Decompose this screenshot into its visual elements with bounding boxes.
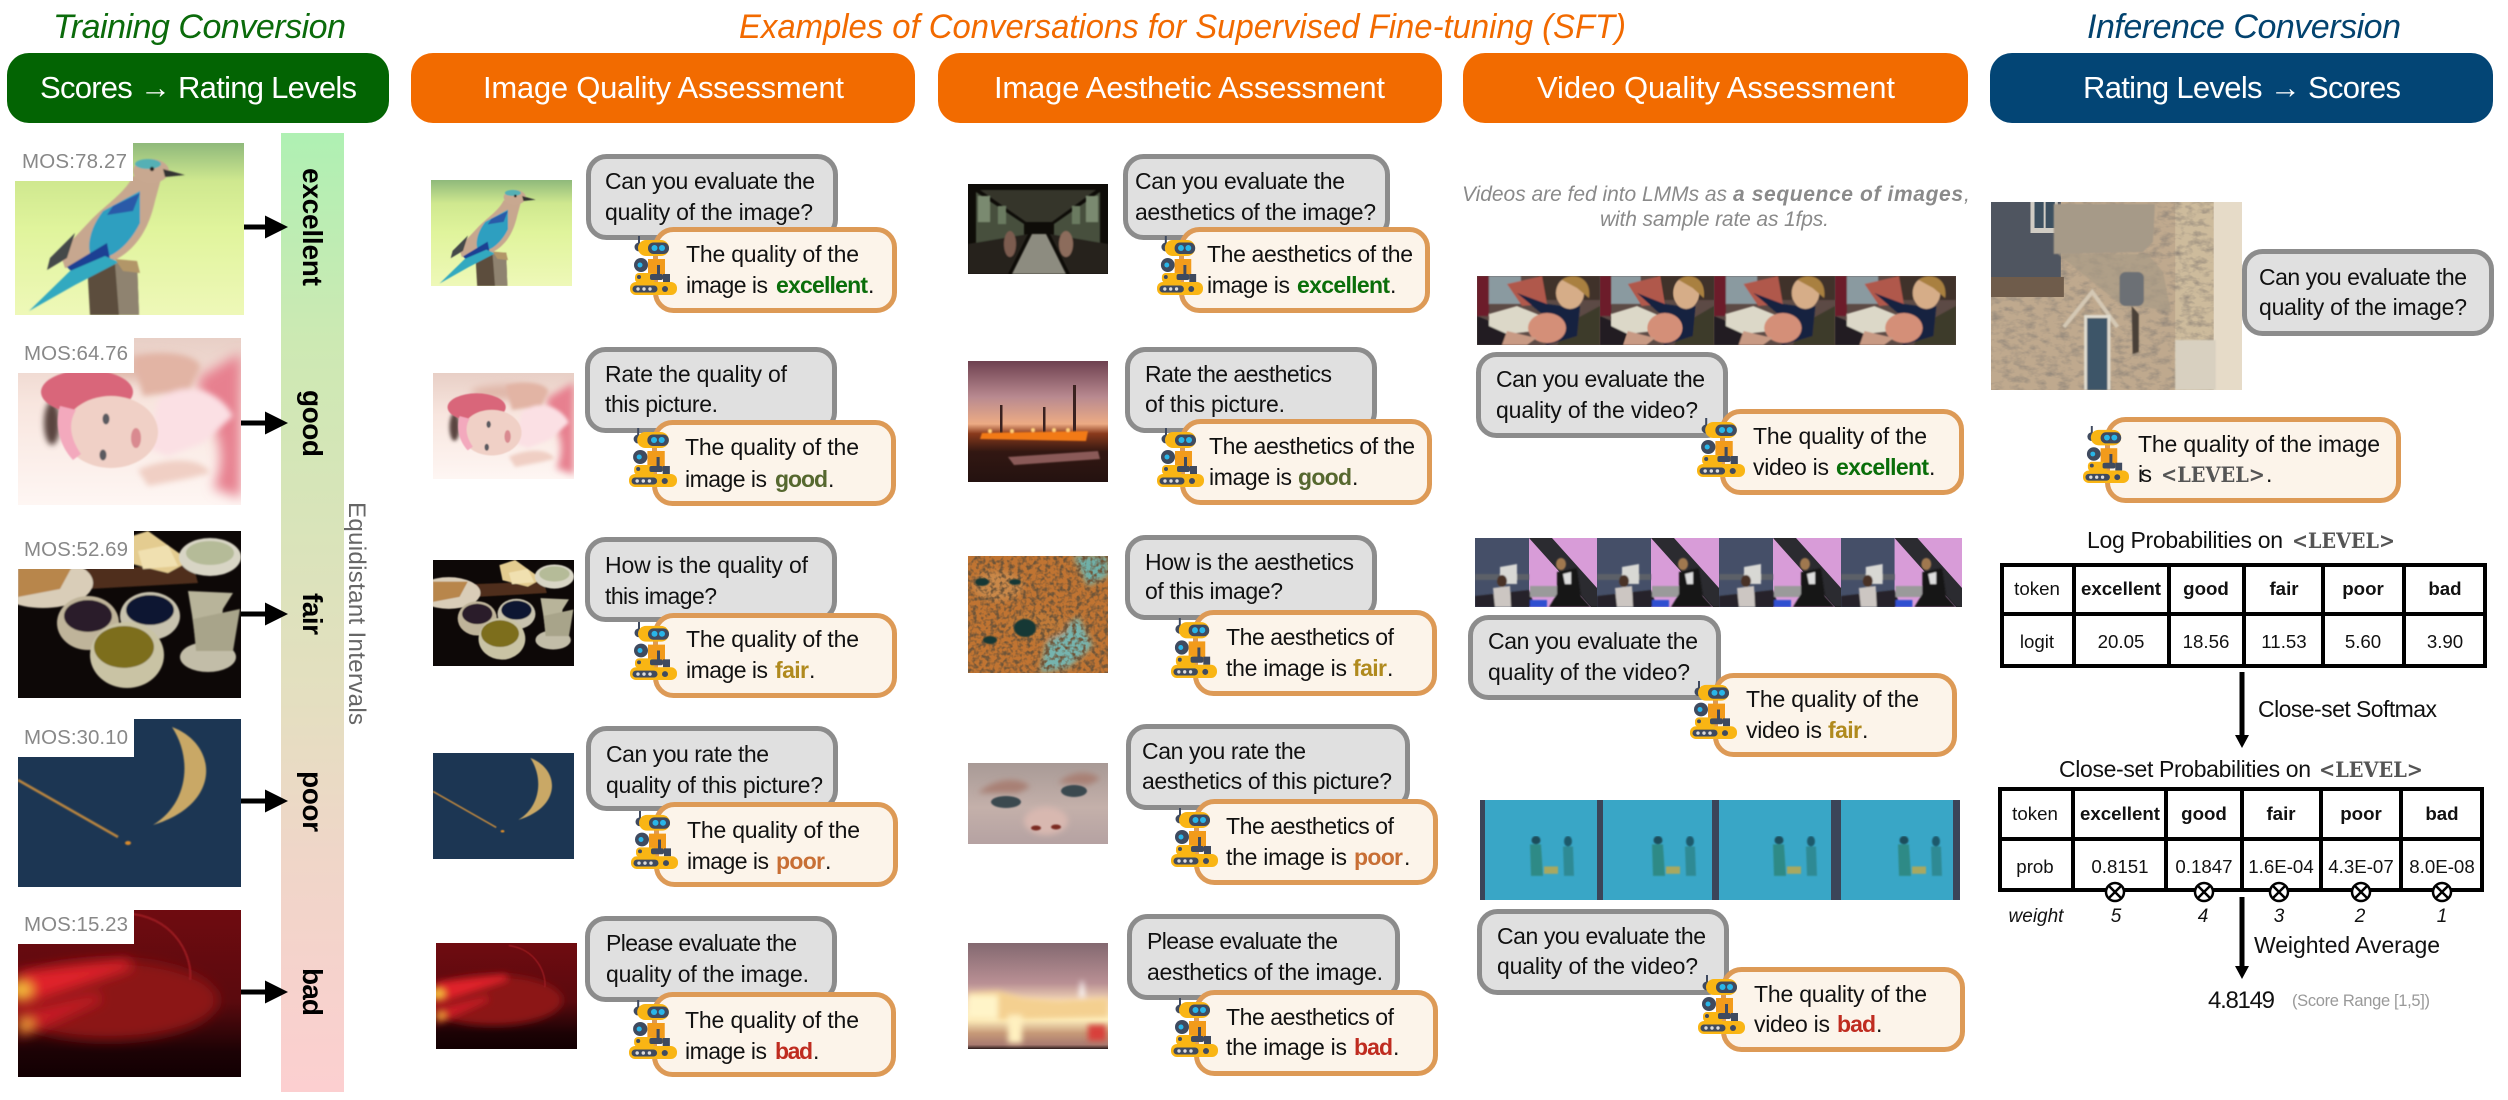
answer bubble: The quality of the bbox=[687, 817, 860, 843]
sample: MOS 30.10: MOS:30.10 bbox=[24, 726, 128, 749]
answer bubble: bad bbox=[1354, 1034, 1393, 1060]
table: close-set probabilities: 4.3E-07 bbox=[2328, 856, 2394, 877]
photo bbox=[433, 373, 574, 479]
answer bubble: video is bbox=[1746, 717, 1822, 743]
answer bubble: The aesthetics of bbox=[1226, 813, 1395, 839]
question bubble: Can you evaluate the bbox=[1497, 923, 1706, 949]
table: log probabilities: good bbox=[2183, 578, 2229, 599]
table: log probabilities: 18.56 bbox=[2183, 631, 2229, 652]
table: close-set probabilities: 0.8151 bbox=[2091, 856, 2149, 877]
arrow bbox=[241, 602, 288, 626]
question bubble bbox=[1128, 726, 1408, 808]
icon: robot bbox=[629, 1000, 677, 1059]
table: log probabilities: logit bbox=[2020, 631, 2055, 652]
photo bbox=[431, 180, 572, 286]
answer bubble: excellent bbox=[1836, 454, 1929, 480]
header: Video Quality Assessment: Video Quality Assessment bbox=[1537, 70, 1895, 105]
table: close-set probabilities: excellent bbox=[2080, 803, 2160, 824]
icon: robot bbox=[630, 236, 677, 295]
example: excellent bbox=[1477, 276, 1962, 492]
answer bubble: the image is bbox=[1226, 844, 1347, 870]
icon: robot bbox=[1171, 998, 1218, 1057]
question bubble: aesthetics of the image. bbox=[1147, 959, 1383, 985]
weights row: 1 bbox=[2437, 906, 2447, 927]
photo bbox=[968, 361, 1108, 482]
question bubble: Can you evaluate the bbox=[1488, 628, 1698, 654]
title: Examples of Conversations: Examples of Conversations for Supervised Fine-tuning (SFT) bbox=[739, 8, 1626, 46]
video frames bbox=[1480, 800, 1960, 900]
question bubble: Can you rate the bbox=[1142, 738, 1306, 764]
answer bubble: . bbox=[1876, 1011, 1882, 1037]
example: bad bbox=[968, 916, 1436, 1074]
answer bubble: The quality of the bbox=[1746, 686, 1919, 712]
arrow bbox=[241, 980, 288, 1004]
score range note: (Score Range [1,5]) bbox=[2292, 992, 2430, 1010]
question bubble bbox=[1478, 354, 1726, 436]
answer bubble: . bbox=[828, 466, 834, 492]
title: Training Conversion: Training Conversion bbox=[53, 8, 346, 46]
table: close-set probabilities: fair bbox=[2266, 803, 2296, 824]
answer bubble: The quality of the bbox=[686, 626, 859, 652]
table: log probabilities: 11.53 bbox=[2261, 631, 2307, 652]
arrow: softmax bbox=[2235, 672, 2249, 748]
answer bubble: The aesthetics of the bbox=[1207, 241, 1413, 267]
label: excellent: excellent bbox=[297, 168, 328, 286]
sample: MOS 52.69: MOS:52.69 bbox=[24, 538, 128, 561]
question bubble: Can you rate the bbox=[606, 741, 769, 767]
question bubble: of this picture. bbox=[1145, 391, 1285, 417]
label: bad: bad bbox=[297, 968, 328, 1016]
photo bbox=[968, 184, 1108, 274]
question bubble bbox=[588, 918, 834, 1000]
panel: training conversion bbox=[0, 133, 370, 1092]
axis label: Equidistant Intervals: Equidistant Intervals bbox=[343, 502, 370, 725]
answer bubble: image is bbox=[1207, 272, 1290, 298]
question bubble: of this image? bbox=[1145, 578, 1283, 604]
answer bubble: image is bbox=[687, 848, 769, 874]
icon: robot bbox=[1157, 428, 1204, 487]
table: close-set probabilities: good bbox=[2181, 803, 2227, 824]
table: log probabilities bbox=[2000, 563, 2487, 668]
answer bubble template: The quality of the image bbox=[2138, 431, 2380, 457]
panel: image aesthetic assessment examples bbox=[968, 156, 1436, 1074]
icon: robot bbox=[1690, 681, 1737, 739]
question bubble bbox=[588, 350, 834, 430]
question bubble: How is the aesthetics bbox=[1145, 549, 1354, 575]
answer bubble: image is bbox=[686, 657, 768, 683]
question bubble bbox=[588, 156, 836, 238]
panel: image quality assessment examples bbox=[417, 156, 896, 1074]
question bubble bbox=[1480, 912, 1726, 992]
example: bad bbox=[1480, 800, 1962, 1050]
answer bubble: poor bbox=[1354, 844, 1403, 870]
note: video sampling bbox=[1462, 183, 1970, 231]
example: poor bbox=[433, 728, 896, 884]
table: log probabilities: poor bbox=[2342, 578, 2384, 599]
sample: MOS 15.23 bbox=[0, 910, 241, 1077]
answer bubble: fair bbox=[775, 657, 809, 683]
answer bubble: bad bbox=[1837, 1011, 1876, 1037]
answer bubble: the image is bbox=[1226, 1034, 1347, 1060]
example: good bbox=[968, 350, 1430, 502]
header: Image Quality Assessment: Image Quality Assessment bbox=[483, 70, 844, 105]
question bubble: Can you evaluate the bbox=[605, 168, 815, 194]
answer bubble template bbox=[2108, 420, 2398, 500]
rating scale bar bbox=[281, 133, 344, 1092]
answer bubble: . bbox=[1404, 844, 1410, 870]
answer bubble: good bbox=[1298, 464, 1352, 490]
answer bubble: . bbox=[809, 657, 815, 683]
table heading: close-set probabilities: <LEVEL> bbox=[2319, 757, 2423, 782]
question bubble: Rate the quality of bbox=[605, 361, 788, 387]
photo bbox=[433, 753, 574, 859]
example: bad bbox=[423, 918, 894, 1074]
question bubble: quality of this picture? bbox=[606, 772, 823, 798]
question bubble: quality of the video? bbox=[1488, 659, 1690, 685]
label: poor: poor bbox=[297, 771, 328, 832]
question bubble: quality of the video? bbox=[1496, 397, 1698, 423]
question bubble bbox=[1128, 350, 1374, 430]
answer bubble bbox=[656, 616, 894, 696]
answer bubble: good bbox=[775, 466, 828, 492]
arrow: weighted average bbox=[2235, 897, 2249, 979]
answer bubble: fair bbox=[1828, 717, 1862, 743]
answer bubble: excellent bbox=[776, 272, 868, 298]
panel: video quality assessment examples bbox=[1462, 183, 1970, 1050]
answer bubble bbox=[656, 230, 894, 310]
note: video sampling: , bbox=[1964, 183, 1970, 206]
answer bubble: The aesthetics of bbox=[1226, 1004, 1395, 1030]
question bubble: aesthetics of this picture? bbox=[1142, 768, 1392, 794]
answer bubble bbox=[1196, 612, 1434, 694]
answer bubble bbox=[1722, 412, 1962, 492]
note: video sampling: with sample rate as 1fps. bbox=[1600, 208, 1829, 231]
table heading: close-set probabilities: Close-set Probabilities on bbox=[2059, 756, 2311, 782]
example: poor bbox=[968, 726, 1436, 882]
answer bubble: . bbox=[813, 1038, 819, 1064]
answer bubble bbox=[656, 804, 896, 884]
weights row: 4 bbox=[2198, 906, 2208, 927]
panel: inference conversion bbox=[1991, 202, 2492, 1014]
answer bubble bbox=[1716, 676, 1954, 754]
weights row: 2 bbox=[2354, 906, 2366, 927]
multiply symbols bbox=[2106, 883, 2451, 901]
answer bubble: excellent bbox=[1297, 272, 1390, 298]
example: good bbox=[433, 350, 894, 504]
table heading: log probabilities: <LEVEL> bbox=[2292, 528, 2395, 553]
header: Image Aesthetic Assessment: Image Aesthetic Assessment bbox=[994, 70, 1385, 105]
answer bubble: bad bbox=[775, 1038, 813, 1064]
question bubble: quality of the image. bbox=[606, 961, 809, 987]
answer bubble: video is bbox=[1753, 454, 1829, 480]
answer bubble bbox=[654, 422, 894, 504]
question bubble: Can you evaluate the bbox=[1496, 366, 1705, 392]
header: Rating Levels to Scores: Rating Levels → Scores bbox=[2083, 70, 2401, 105]
answer bubble: . bbox=[1352, 464, 1358, 490]
sample: MOS 64.76: MOS:64.76 bbox=[24, 342, 128, 365]
table: log probabilities: excellent bbox=[2081, 578, 2161, 599]
answer bubble bbox=[654, 994, 894, 1074]
question bubble bbox=[588, 728, 836, 808]
example: excellent bbox=[431, 156, 894, 310]
question bubble: quality of the image? bbox=[2259, 294, 2467, 320]
note: video sampling: Videos are fed into LMMs as bbox=[1462, 183, 1728, 206]
sample: MOS 15.23: MOS:15.23 bbox=[24, 913, 128, 936]
table: close-set probabilities: prob bbox=[2016, 856, 2054, 877]
icon: robot bbox=[1698, 975, 1745, 1034]
final score: 4.8149 bbox=[2208, 987, 2275, 1014]
answer bubble template: is bbox=[2138, 461, 2152, 487]
icon: robot bbox=[1171, 808, 1218, 867]
photo bbox=[968, 556, 1108, 673]
answer bubble: image is bbox=[685, 466, 767, 492]
example: excellent bbox=[968, 156, 1428, 310]
sample: MOS 78.27: MOS:78.27 bbox=[22, 150, 127, 173]
answer bubble template: <LEVEL> bbox=[2161, 462, 2265, 487]
answer bubble: The quality of the bbox=[1753, 423, 1927, 449]
table: log probabilities: 3.90 bbox=[2427, 631, 2463, 652]
weights row: 3 bbox=[2274, 906, 2285, 927]
icon: robot bbox=[630, 622, 677, 680]
title: Inference Conversion: Inference Conversion bbox=[2087, 8, 2401, 46]
table: close-set probabilities: poor bbox=[2340, 803, 2382, 824]
answer bubble bbox=[1182, 230, 1428, 310]
label: fair: fair bbox=[297, 593, 328, 635]
answer bubble bbox=[1724, 970, 1962, 1050]
example: fair bbox=[417, 540, 894, 696]
answer bubble: . bbox=[1393, 1034, 1399, 1060]
question bubble: Can you evaluate the bbox=[2259, 264, 2467, 290]
photo: building bbox=[1991, 202, 2242, 390]
question bubble: Please evaluate the bbox=[1147, 928, 1338, 954]
header: Image Aesthetic Assessment bbox=[938, 53, 1442, 123]
answer bubble: . bbox=[1862, 717, 1868, 743]
question bubble: aesthetics of the image? bbox=[1135, 199, 1376, 225]
answer bubble: . bbox=[1387, 655, 1393, 681]
answer bubble: The quality of the bbox=[1754, 981, 1927, 1007]
weights row: weight bbox=[2009, 906, 2064, 927]
table: log probabilities: bad bbox=[2428, 578, 2462, 599]
sample: MOS 30.10 bbox=[18, 719, 241, 887]
answer bubble template: . bbox=[2266, 461, 2272, 487]
header: Image Quality Assessment bbox=[411, 53, 915, 123]
question bubble bbox=[1470, 618, 1718, 698]
sample: MOS 64.76 bbox=[18, 338, 241, 505]
question bubble bbox=[1130, 916, 1398, 998]
example: fair bbox=[968, 538, 1434, 694]
question bubble: quality of the video? bbox=[1497, 953, 1698, 979]
label: close-set softmax: Close-set Softmax bbox=[2258, 696, 2438, 722]
answer bubble: image is bbox=[1209, 464, 1292, 490]
question bubble: Please evaluate the bbox=[606, 930, 797, 956]
answer bubble bbox=[1196, 802, 1436, 882]
video frames bbox=[1475, 538, 1962, 607]
label: weighted average: Weighted Average bbox=[2254, 932, 2440, 958]
answer bubble: video is bbox=[1754, 1011, 1830, 1037]
icon: robot bbox=[1157, 236, 1203, 295]
table: close-set probabilities: token bbox=[2012, 803, 2058, 824]
question bubble: this image? bbox=[605, 583, 717, 609]
example: fair bbox=[1470, 538, 1962, 754]
answer bubble: poor bbox=[776, 848, 825, 874]
note: video sampling: a sequence of images bbox=[1733, 183, 1963, 206]
table: log probabilities: token bbox=[2014, 578, 2060, 599]
question bubble bbox=[588, 540, 834, 620]
icon: robot bbox=[1697, 418, 1745, 477]
photo bbox=[417, 560, 574, 666]
answer bubble bbox=[1196, 992, 1436, 1074]
answer bubble: The quality of the bbox=[686, 241, 859, 267]
answer bubble: fair bbox=[1353, 655, 1387, 681]
answer bubble: the image is bbox=[1226, 655, 1347, 681]
header: Rating Levels to Scores bbox=[1990, 53, 2493, 123]
table: close-set probabilities: 8.0E-08 bbox=[2409, 856, 2475, 877]
arrow bbox=[241, 790, 288, 812]
sample: MOS 78.27 bbox=[15, 143, 244, 315]
answer bubble: image is bbox=[686, 272, 768, 298]
photo bbox=[968, 943, 1108, 1049]
question bubble: quality of the image? bbox=[605, 199, 813, 225]
question bubble: Can you evaluate the bbox=[1135, 168, 1345, 194]
photo bbox=[423, 943, 577, 1049]
table heading: log probabilities: Log Probabilities on bbox=[2087, 527, 2283, 553]
icon: robot bbox=[631, 811, 678, 869]
table: close-set probabilities bbox=[1998, 787, 2484, 892]
arrow bbox=[241, 412, 288, 434]
header: Scores to Rating Levels bbox=[7, 53, 389, 123]
icon: robot bbox=[2083, 426, 2129, 483]
question bubble bbox=[1126, 156, 1388, 238]
answer bubble: . bbox=[1390, 272, 1396, 298]
table: log probabilities: 5.60 bbox=[2345, 631, 2381, 652]
label: good: good bbox=[297, 390, 328, 457]
question bubble: Rate the aesthetics bbox=[1145, 361, 1332, 387]
answer bubble: The quality of the bbox=[685, 1007, 859, 1033]
table: close-set probabilities: 0.1847 bbox=[2175, 856, 2233, 877]
answer bubble bbox=[1182, 422, 1430, 502]
question bubble: this picture. bbox=[605, 391, 718, 417]
answer bubble: . bbox=[1929, 454, 1935, 480]
answer bubble: The quality of the bbox=[685, 434, 859, 460]
icon: robot bbox=[1171, 618, 1217, 678]
answer bubble: . bbox=[868, 272, 874, 298]
photo bbox=[968, 763, 1108, 844]
arrow bbox=[244, 216, 288, 238]
answer bubble: The aesthetics of the bbox=[1209, 433, 1415, 459]
table: close-set probabilities: bad bbox=[2425, 803, 2459, 824]
table: close-set probabilities: 1.6E-04 bbox=[2248, 856, 2314, 877]
header: Scores to Rating Levels: Scores → Rating Levels bbox=[40, 70, 357, 105]
question bubble bbox=[1128, 538, 1374, 618]
question bubble bbox=[2244, 252, 2492, 334]
sample: MOS 52.69 bbox=[0, 531, 241, 698]
header: Video Quality Assessment bbox=[1463, 53, 1968, 123]
answer bubble: . bbox=[825, 848, 831, 874]
video frames bbox=[1477, 276, 1956, 345]
table: log probabilities: 20.05 bbox=[2098, 631, 2144, 652]
table: log probabilities: fair bbox=[2269, 578, 2299, 599]
question bubble: How is the quality of bbox=[605, 552, 809, 578]
answer bubble: image is bbox=[685, 1038, 767, 1064]
answer bubble: The aesthetics of bbox=[1226, 624, 1395, 650]
icon: robot bbox=[629, 428, 677, 487]
weights row bbox=[2009, 906, 2447, 927]
weights row: 5 bbox=[2111, 906, 2122, 927]
